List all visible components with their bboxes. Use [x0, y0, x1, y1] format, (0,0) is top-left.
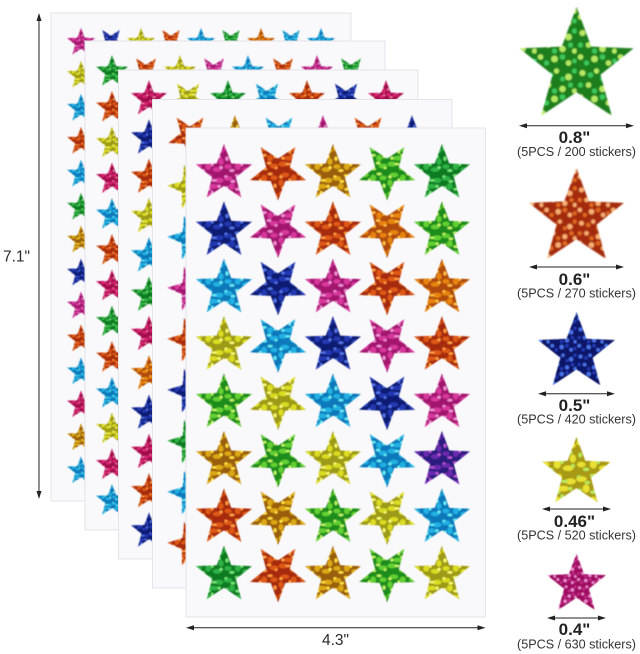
- icon: yellow star: [542, 437, 611, 502]
- sheet 4 stars: [163, 115, 434, 567]
- sticker count: (5PCS / 420 stickers): [517, 413, 636, 427]
- size panel: 0.46 inch: [517, 437, 636, 543]
- height dimension arrow: [36, 13, 42, 499]
- sheet 3 stars: [131, 80, 404, 547]
- sheet 3: [118, 70, 418, 559]
- arrow: 0.5 inch width: [538, 391, 615, 396]
- sticker count: (5PCS / 200 stickers): [517, 145, 636, 159]
- arrow: 0.4 inch width: [547, 616, 606, 620]
- arrow: 0.6 inch width: [529, 264, 624, 270]
- sheet 5 (front): [186, 128, 486, 617]
- sticker count: (5PCS / 630 stickers): [517, 638, 636, 652]
- size panel: 0.6 inch: [517, 168, 636, 301]
- size panel: 0.4 inch: [517, 554, 636, 652]
- sheet 5 stars grid: [196, 144, 470, 602]
- sheet 1 stars: [67, 28, 335, 483]
- size value: 0.46": [554, 512, 595, 531]
- size value: 0.8": [559, 128, 590, 147]
- arrow: 0.8 inch width: [519, 123, 634, 128]
- sheet 2 stars: [96, 55, 367, 515]
- width dimension arrow: [186, 625, 486, 630]
- icon: magenta star: [547, 554, 606, 610]
- icon: navy star: [538, 312, 615, 385]
- size panel: 0.5 inch: [517, 312, 636, 427]
- size value: 0.6": [559, 270, 590, 289]
- sheet 4: [152, 100, 452, 588]
- sticker count: (5PCS / 270 stickers): [517, 287, 636, 301]
- height label: 7.1": [3, 248, 30, 266]
- icon: green star: [520, 7, 633, 116]
- size value: 0.4": [559, 620, 590, 639]
- sheet 2: [85, 41, 385, 530]
- size value: 0.5": [559, 396, 590, 415]
- sheet 1 (backmost): [51, 13, 351, 501]
- arrow: 0.46 inch width: [542, 506, 611, 512]
- icon: orange-red star: [529, 168, 624, 259]
- sticker count: (5PCS / 520 stickers): [517, 529, 636, 543]
- size panel: 0.8 inch: [517, 7, 636, 159]
- width label: 4.3": [322, 632, 349, 649]
